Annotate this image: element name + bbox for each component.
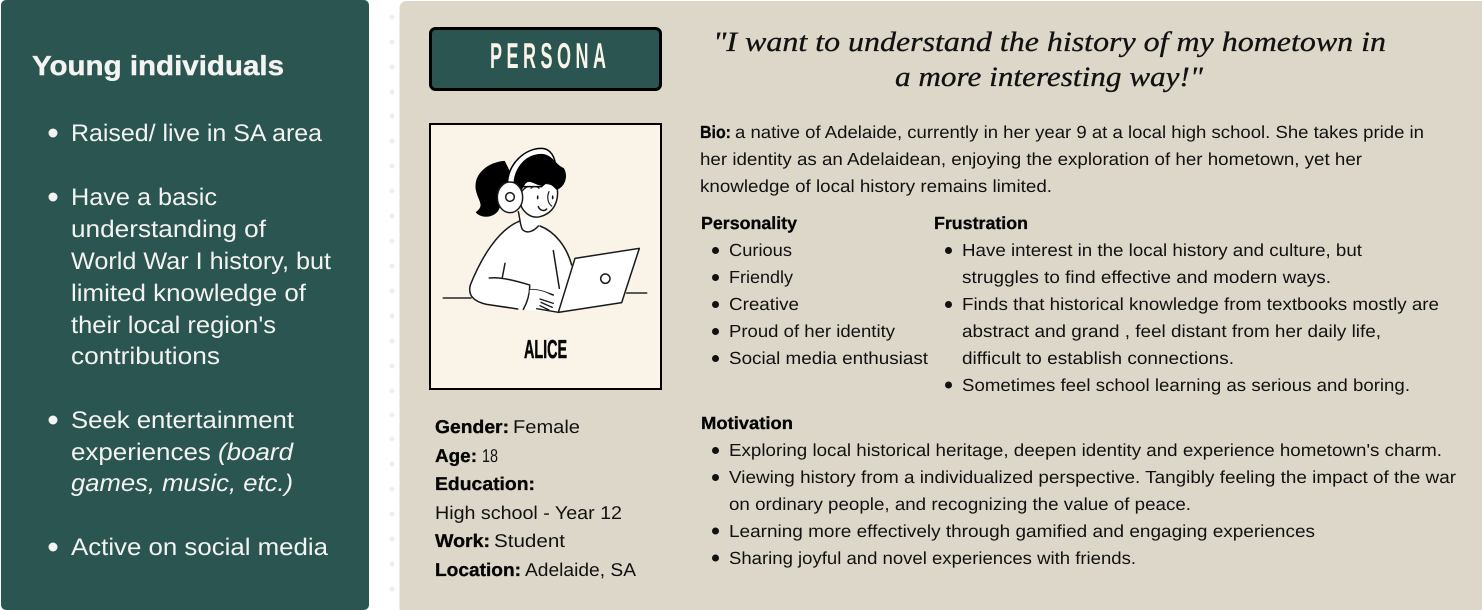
bio text bbox=[700, 122, 1424, 196]
bullet list: audience traits: Active on social media bbox=[71, 534, 329, 561]
motivation list: Motivation bbox=[701, 413, 793, 433]
bio text: a native of Adelaide, currently in her year 9 at a local high school. She takes pride in bbox=[735, 122, 1424, 142]
frustration list: Finds that historical knowledge from textbooks mostly are bbox=[962, 294, 1439, 314]
demographics: Age: bbox=[435, 445, 477, 466]
bullet list: audience traits bbox=[48, 120, 331, 561]
motivation list: Sharing joyful and novel experiences with friends. bbox=[729, 548, 1136, 568]
frustration list: difficult to establish connections. bbox=[962, 348, 1234, 368]
demographics: Gender: bbox=[435, 416, 509, 437]
frustration list: Have interest in the local history and culture, but bbox=[962, 240, 1362, 260]
demographics: Female bbox=[513, 416, 580, 437]
quote: a more interesting way!" bbox=[895, 62, 1203, 93]
personality list: Curious bbox=[729, 240, 792, 260]
frustration list bbox=[934, 213, 1439, 395]
motivation list: Exploring local historical heritage, deepen identity and experience hometown's charm. bbox=[729, 440, 1442, 460]
bullet list: audience traits: understanding of bbox=[71, 216, 266, 243]
frustration list: abstract and grand , feel distant from her daily life, bbox=[962, 321, 1381, 341]
icon: woman with headphones at laptop bbox=[443, 148, 647, 312]
demographics: Adelaide, SA bbox=[525, 559, 637, 580]
motivation list bbox=[701, 413, 1456, 568]
bullet list: audience traits: World War I history, but bbox=[71, 248, 331, 275]
avatar card: Alice bbox=[430, 124, 661, 389]
panel: persona card bbox=[400, 1, 1482, 610]
demographics: Student bbox=[494, 530, 565, 551]
motivation list: on ordinary people, and recognizing the value of peace. bbox=[729, 494, 1191, 514]
personality list: Proud of her identity bbox=[729, 321, 895, 341]
bullet list: audience traits: their local region's bbox=[71, 312, 276, 339]
persona badge bbox=[430, 28, 660, 90]
motivation list: Viewing history from a individualized perspective. Tangibly feeling the impact of the war bbox=[729, 467, 1456, 487]
demographics: High school - Year 12 bbox=[435, 502, 622, 523]
demographics: Location: bbox=[435, 559, 521, 580]
bullet list: audience traits: games, music, etc.) bbox=[71, 470, 293, 497]
bullet list: audience traits: Raised/ live in SA area bbox=[71, 120, 323, 147]
persona badge: PERSONA bbox=[490, 35, 606, 76]
personality list: Personality bbox=[701, 213, 797, 233]
quote: "I want to understand the history of my hometown in bbox=[713, 27, 1386, 58]
demographics bbox=[435, 416, 637, 580]
bio text: knowledge of local history remains limited. bbox=[700, 176, 1052, 196]
personality list: Friendly bbox=[729, 267, 793, 287]
demographics: Education: bbox=[435, 473, 535, 494]
demographics: Work: bbox=[435, 530, 490, 551]
frustration list: Sometimes feel school learning as serious and boring. bbox=[962, 375, 1410, 395]
demographics: 18 bbox=[482, 445, 498, 466]
bio text: Bio: bbox=[700, 122, 731, 142]
panel: target audience bbox=[1, 0, 369, 610]
personality list bbox=[701, 213, 928, 368]
motivation list: Learning more effectively through gamified and engaging experiences bbox=[729, 521, 1315, 541]
bullet list: audience traits: Seek entertainment bbox=[71, 407, 294, 434]
name label: ALICE bbox=[524, 334, 567, 364]
heading: young individuals: Young individuals bbox=[32, 50, 284, 81]
bio text: her identity as an Adelaidean, enjoying the exploration of her hometown, yet her bbox=[700, 149, 1362, 169]
personality list: Social media enthusiast bbox=[729, 348, 928, 368]
quote bbox=[713, 27, 1386, 93]
frustration list: Frustration bbox=[934, 213, 1028, 233]
bullet list: audience traits: contributions bbox=[71, 343, 220, 370]
bullet list: audience traits: Have a basic bbox=[71, 184, 217, 211]
frustration list: struggles to find effective and modern ways. bbox=[962, 267, 1331, 287]
personality list: Creative bbox=[729, 294, 799, 314]
bullet list: audience traits: experiences (board bbox=[71, 439, 294, 466]
bullet list: audience traits: limited knowledge of bbox=[71, 280, 306, 307]
